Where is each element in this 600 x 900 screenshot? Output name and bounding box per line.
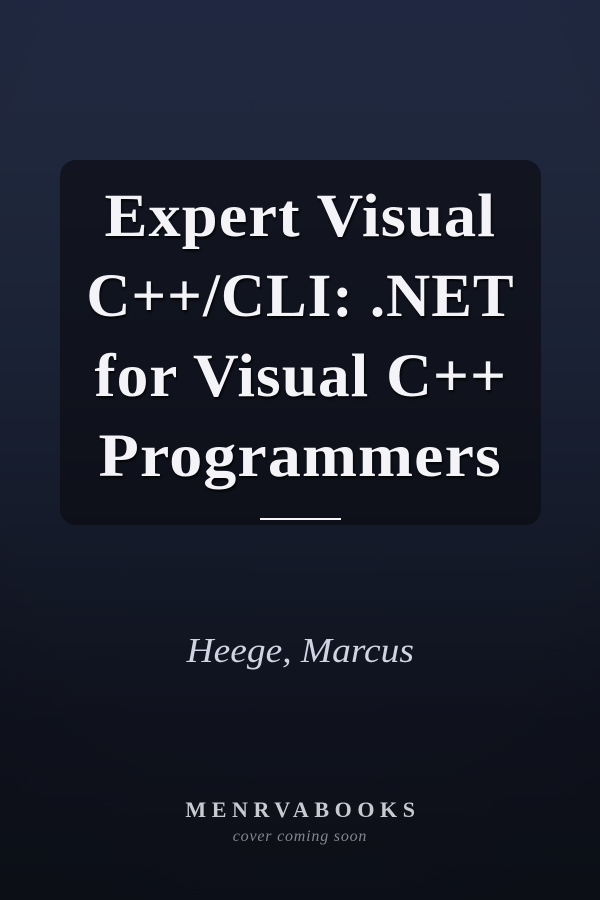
cover note: cover coming soon: [233, 828, 367, 845]
title: [86, 183, 515, 492]
title: for Visual C++: [94, 343, 507, 410]
author: Heege, Marcus: [186, 631, 414, 670]
publisher brand: MENRVABOOKS: [185, 797, 421, 822]
panel: title backdrop: [60, 160, 541, 525]
accent rule: [260, 518, 341, 520]
title: C++/CLI: .NET: [86, 263, 515, 330]
title: Expert Visual: [105, 183, 496, 250]
title: Programmers: [99, 423, 502, 490]
